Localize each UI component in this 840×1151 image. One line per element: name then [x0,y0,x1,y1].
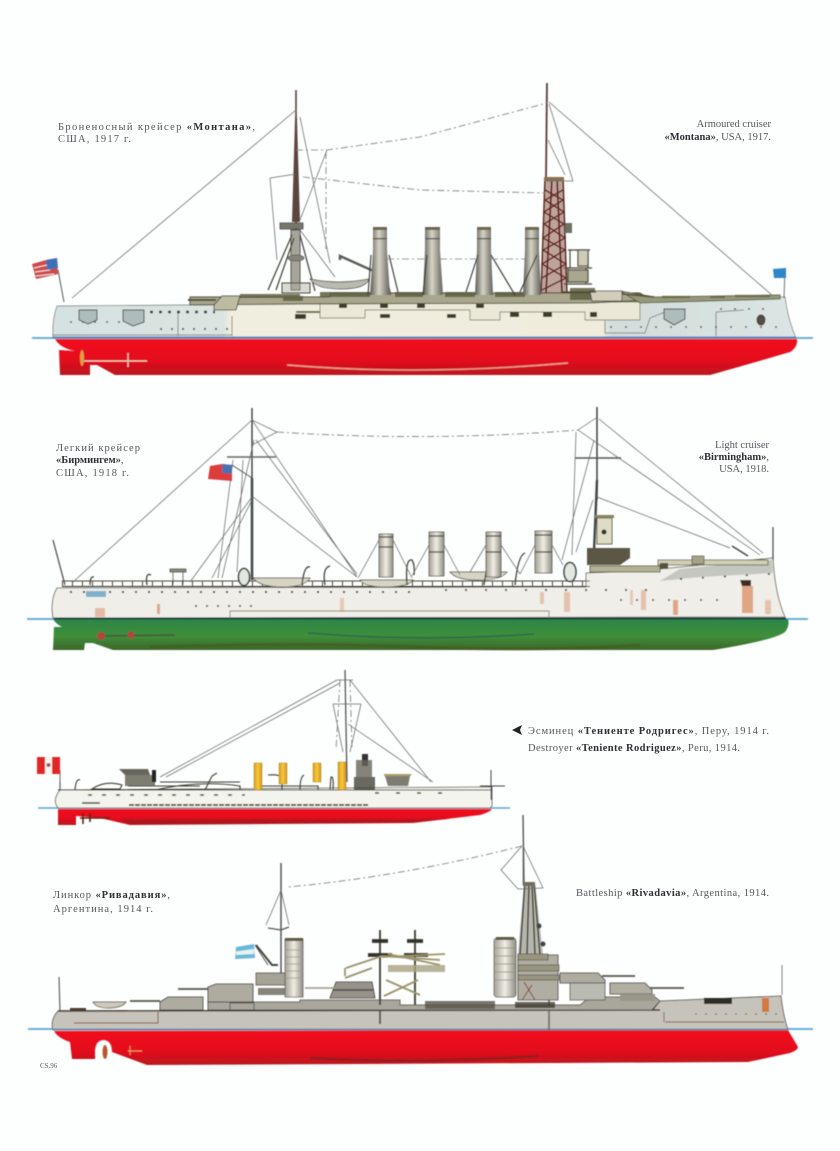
armour strake [129,804,368,806]
turret 1 aft low [130,997,203,1010]
turret 2 aft high [178,984,253,1002]
grey hull [52,996,788,1030]
hull panel lines and portholes [53,302,780,336]
propeller and shaft [80,350,147,367]
bridge [587,515,630,565]
rigging [72,102,773,298]
rigging [53,418,773,585]
funnel bands [379,535,552,552]
caption: Montana Russian: США, 1917 г. [58,134,131,145]
forward turret low [610,983,684,1001]
portholes [88,793,445,795]
aft boat [93,1002,126,1008]
red lower hull [54,1030,798,1065]
deck rail [62,581,590,586]
ventilators oval [238,562,576,586]
flag [208,464,252,481]
caption: Birmingham English: Light cruiser [715,440,769,451]
armour strip [54,1028,788,1030]
bridge structure [562,250,596,292]
caption: Birmingham Russian [56,443,140,479]
yellow funnels [254,762,346,790]
caption: Birmingham Russian: США, 1918 г. [56,468,129,479]
funnels [368,227,541,295]
superstructure deck [70,997,660,1011]
white hull [52,558,785,618]
aft turret and gun [188,296,240,310]
forecastle shading [660,560,773,581]
belt line [230,611,549,618]
red lower hull [58,809,492,825]
caption: Montana English [665,119,771,143]
forecastle deck fittings [590,546,768,572]
stern flag [32,258,64,302]
rigging [266,846,782,995]
fouling texture [150,644,640,649]
rear mast [268,90,315,293]
superstructure deck [190,293,650,305]
red lower hull [55,339,797,375]
caption: Rivadavia Russian: Линкор «Ривадавия», [53,890,170,901]
pointer arrow [512,725,522,735]
aft gun platform [119,769,156,786]
bilge keel [308,633,534,638]
rear mast [227,408,276,580]
propeller [102,1045,142,1059]
aft funnel [285,938,303,997]
caption: destroyer Russian: Эсминец «Тениенте Родригес», Перу, 1914 г. [528,726,769,737]
stern name plate [86,591,106,597]
boats [170,569,507,587]
davits [90,553,525,585]
dark keel band [120,819,450,824]
caption: Birmingham English: USA, 1918. [719,464,769,475]
waterline [27,618,808,620]
anchor at bow [740,580,751,586]
caption: Montana Russian: Броненосный крейсер «Монтана», [58,122,255,133]
caption: Birmingham Russian: Легкий крейсер [56,443,140,454]
armour belt line [53,336,796,338]
bow staff [480,770,505,800]
casemates [79,309,765,326]
upper hull [53,297,796,338]
boat and crane [310,256,390,295]
caption: Birmingham English [699,440,769,475]
main lattice mast [541,83,572,293]
mast [345,670,347,782]
waterline [38,807,510,809]
ship: destroyer Teniente Rodriguez [37,670,510,825]
stern fitting [82,802,100,804]
funnel stays [358,540,563,578]
fore mast [575,407,621,552]
jack at bow [773,268,786,298]
midship turret [305,982,375,998]
caption: Montana Russian [58,122,255,145]
bilge keel [310,1056,538,1061]
green lower hull [53,619,789,650]
forward turret and gun [590,291,654,301]
caption: Birmingham Russian: «Бирмингем», [56,455,124,466]
midship casemate tier [295,302,640,320]
caption: Rivadavia Russian: Аргентина, 1914 г. [53,904,153,915]
propellers [97,632,175,640]
bilge keel [287,363,568,370]
flag of Argentina [235,944,268,965]
hull lines [58,998,784,1030]
deck line and rail [58,789,492,791]
caption: Rivadavia Russian [53,890,170,915]
caption: Montana English: Armoured cruiser [697,119,771,130]
cage masts and derricks [345,930,445,1005]
white hull [55,787,492,808]
caption: Rivadavia English: Battleship «Rivadavia», Argentina, 1914. [576,888,769,899]
aft mast [256,863,289,995]
portholes [70,574,770,606]
fore cage mast and tower [518,815,559,1000]
caption: Birmingham English: «Birmingham», [699,452,769,463]
fore bridge and gun [354,754,411,790]
flag of Peru [37,757,60,790]
propeller [80,813,110,824]
waterline [28,1028,813,1030]
funnels [379,531,552,577]
caption: Montana English: «Montana», USA, 1917. [665,132,771,143]
aft staff [59,977,60,1012]
deck fittings [60,773,333,790]
ship: battleship Rivadavia [28,815,813,1065]
ship: light cruiser Birmingham [27,407,808,650]
ship: armoured cruiser Montana [32,83,813,375]
forward deck band [620,291,780,303]
caption: destroyer English: Destroyer «Teniente Rodriguez», Peru, 1914. [528,743,740,754]
forward turret high [560,973,635,1000]
caption: destroyer [512,725,769,754]
rust streaks [95,586,771,617]
artist signature: CS.96 [40,1062,58,1070]
forward fittings [662,296,770,297]
dark waterline [54,618,786,620]
deck clutter [240,288,595,301]
rigging [160,680,433,782]
waterline [32,337,813,339]
forward funnel [494,937,516,997]
